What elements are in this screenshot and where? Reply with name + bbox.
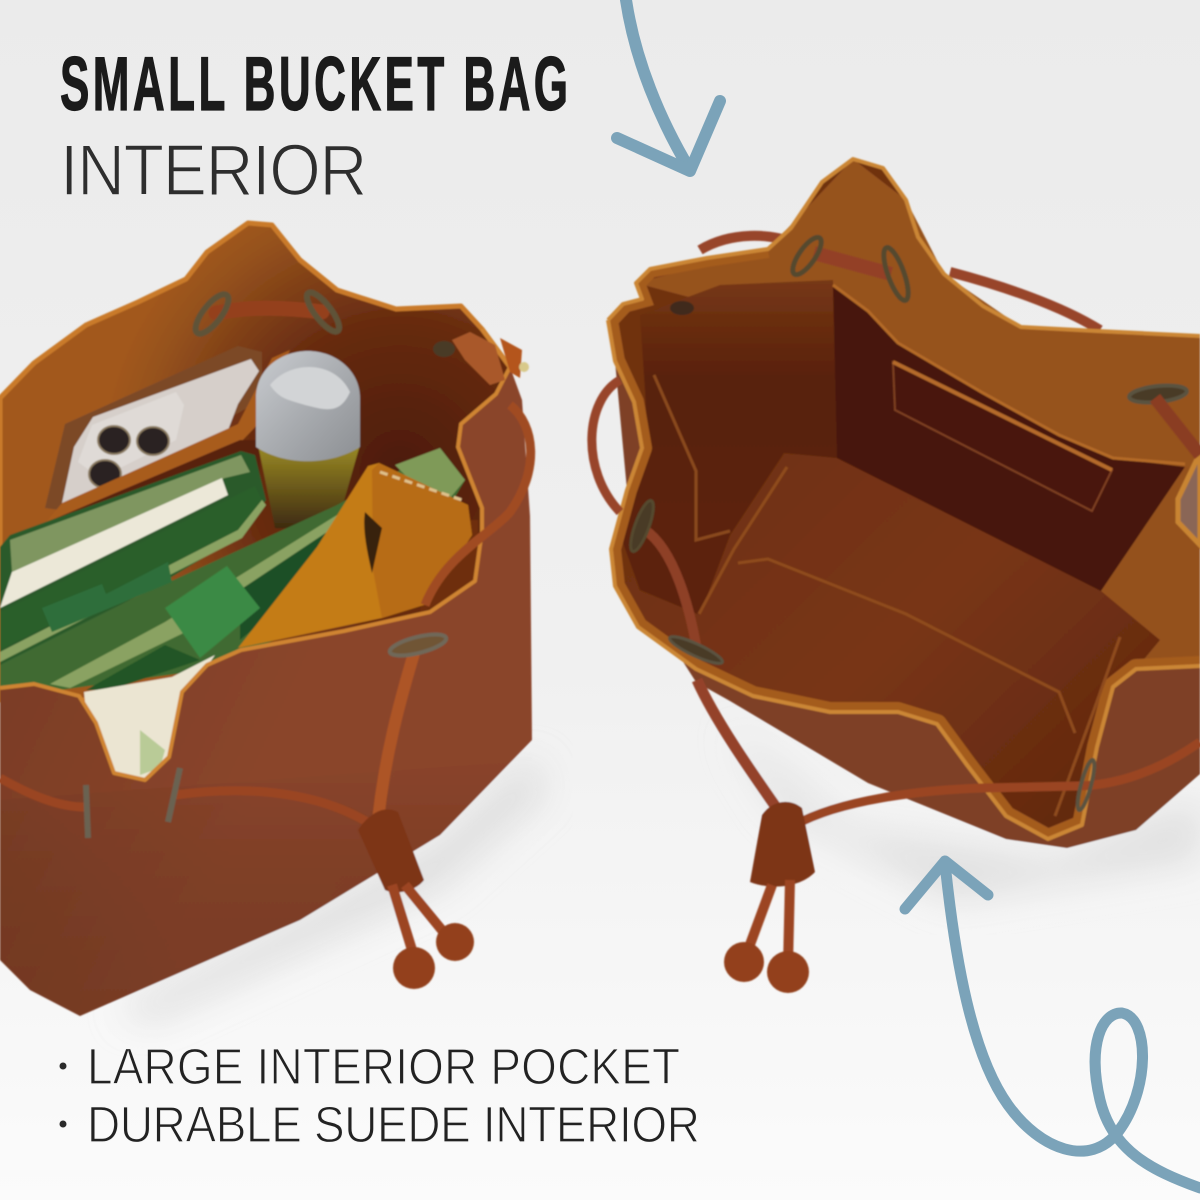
phone [62, 359, 259, 505]
bullet 1: LARGE INTERIOR POCKET [87, 1039, 680, 1096]
tan leather pouch [238, 463, 478, 648]
green leather notebook [0, 451, 266, 665]
bottle oil [258, 445, 360, 528]
bottle cap [256, 351, 360, 461]
notebook card slot [42, 562, 172, 632]
front leather body [0, 367, 532, 1016]
hanging cord [378, 650, 415, 820]
eyelet: left [626, 498, 658, 554]
eyelet: rear right [302, 288, 344, 336]
eyelet: top right [879, 245, 913, 303]
interior shadow below pocket [40, 440, 260, 540]
lower left cord [697, 680, 778, 810]
right suede wall [1101, 467, 1200, 669]
eyelet: right [1128, 383, 1188, 405]
pocket on back wall [833, 285, 1185, 591]
title line 2: INTERIOR [60, 129, 367, 211]
eyelet: upper left [670, 301, 694, 315]
body lower shading [0, 740, 532, 1016]
floor shadow [730, 730, 1200, 900]
inner rim glow [608, 304, 1200, 839]
fold at right edge [1178, 453, 1200, 545]
interior behind pouch [420, 520, 478, 612]
back interior wall [0, 223, 510, 700]
cord tails and knots [392, 885, 474, 989]
page edge band [50, 515, 340, 688]
rear short cord [814, 253, 891, 274]
inner pocket backing [45, 346, 262, 510]
notebook edge [0, 500, 266, 662]
suede pocket lip [46, 350, 290, 522]
top left lip highlight [623, 249, 768, 304]
bullet list [60, 1039, 700, 1154]
eyelet: far right [433, 341, 455, 357]
eyelet: rear left [190, 290, 234, 338]
left bag: open with contents [0, 223, 545, 1020]
side cord [592, 380, 620, 512]
front drawstring [0, 778, 372, 825]
left wall seam [654, 375, 730, 540]
arrow: bottom, looped, pointing to right bag [905, 861, 1200, 1188]
inner leather patch [893, 362, 1112, 511]
notebook cover [0, 486, 262, 650]
green strap [165, 566, 260, 658]
rim edge [608, 159, 1200, 839]
eyelet: top left [788, 233, 826, 279]
leather toggle [750, 802, 815, 887]
floor seam [699, 467, 1120, 816]
notebook inner flap [10, 455, 250, 572]
pocket edge lip [833, 285, 1185, 464]
right cord [1155, 398, 1200, 455]
left dark wall [622, 280, 837, 615]
notebook cover flap [0, 451, 266, 665]
eyelet: front right [388, 630, 448, 660]
leather toggle [358, 809, 424, 892]
bullet 2: DURABLE SUEDE INTERIOR [87, 1097, 700, 1154]
arrow: top, pointing to right bag [617, 0, 720, 171]
eyelet: lower left [667, 632, 725, 668]
rear drawstring [700, 236, 1100, 330]
title [60, 43, 568, 211]
eyelet: front left pair [86, 768, 180, 838]
inner left cord [645, 530, 697, 650]
floor shadow [120, 760, 545, 1020]
right bag: empty interior [592, 159, 1200, 993]
pouch stitching [380, 472, 462, 500]
cord tails and knots [724, 880, 809, 993]
outer leather body [611, 361, 1200, 848]
pouch slit [364, 512, 382, 573]
bottle [256, 351, 360, 528]
suede interior [608, 159, 1200, 839]
right cord loop [425, 405, 531, 605]
phone camera module [78, 392, 184, 478]
green folio with page edges [0, 448, 465, 690]
rim edge highlight [0, 329, 510, 780]
front drawstring [795, 742, 1200, 825]
cream pouch [84, 655, 215, 795]
eyelet: lower right [1074, 759, 1098, 811]
front side tab and buckle [452, 332, 529, 385]
upper suede back wall [636, 159, 1200, 500]
cream pages [0, 478, 228, 608]
rear drawstring [216, 308, 322, 313]
title line 1: SMALL BUCKET BAG [60, 43, 568, 127]
